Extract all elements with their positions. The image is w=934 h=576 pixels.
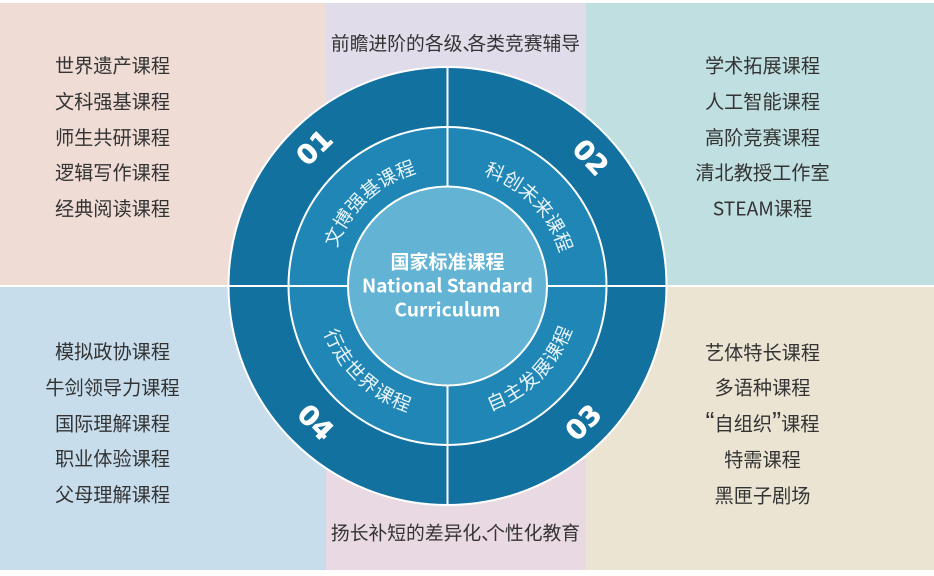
center title <box>362 248 533 322</box>
list: top left courses: 经典阅读课程 <box>55 194 170 222</box>
number 04: 04 <box>291 399 339 447</box>
segment label 03: 自主发展课程 <box>488 326 573 412</box>
center title: National Standard <box>362 272 533 298</box>
center title: Curriculum <box>394 296 500 322</box>
list: bottom right courses: 特需课程 <box>724 444 801 472</box>
list: top left courses: 逻辑写作课程 <box>55 158 170 186</box>
segment label 01: 文博强基课程 <box>325 159 416 248</box>
quadrant dividers <box>229 68 666 504</box>
list: top left courses <box>55 50 170 222</box>
list: top right courses <box>695 50 830 222</box>
center title: 国家标准课程 <box>390 248 505 274</box>
list: bottom left courses: 牛剑领导力课程 <box>45 372 180 400</box>
list: top right courses: STEAM课程 <box>713 194 812 222</box>
list: bottom left courses: 职业体验课程 <box>55 444 170 472</box>
circular diagram <box>228 66 668 506</box>
segment label 04: 行走世界课程 <box>324 328 412 413</box>
number 03: 03 <box>560 399 608 447</box>
middle ring <box>288 127 606 445</box>
list: top right courses: 学术拓展课程 <box>705 50 820 78</box>
top caption: 前瞻进阶的各级、各类竞赛辅导 <box>331 29 580 56</box>
list: bottom left courses: 模拟政协课程 <box>55 336 170 364</box>
list: top right courses: 高阶竞赛课程 <box>705 122 820 150</box>
list: top right courses: 清北教授工作室 <box>695 158 830 186</box>
list: top left courses: 师生共研课程 <box>55 122 170 150</box>
list: top right courses: 人工智能课程 <box>705 86 820 114</box>
segment label 02: 科创未来课程 <box>485 162 574 253</box>
list: bottom right courses: 多语种课程 <box>715 372 810 400</box>
list: bottom left courses: 国际理解课程 <box>55 408 170 436</box>
list: top left courses: 世界遗产课程 <box>55 50 170 78</box>
list: bottom left courses: 父母理解课程 <box>55 480 170 508</box>
list: bottom right courses <box>705 338 820 508</box>
center circle <box>348 186 547 386</box>
bottom caption: 扬长补短的差异化、个性化教育 <box>331 518 580 546</box>
outer ring <box>228 67 666 505</box>
list: bottom right courses: “自组织”课程 <box>706 406 819 436</box>
list: bottom left courses <box>45 336 180 508</box>
list: bottom right courses: 黑匣子剧场 <box>715 480 810 508</box>
number 01: 01 <box>291 124 339 172</box>
list: bottom right courses: 艺体特长课程 <box>705 338 820 366</box>
list: top left courses: 文科强基课程 <box>55 86 170 114</box>
number 02: 02 <box>566 134 614 182</box>
